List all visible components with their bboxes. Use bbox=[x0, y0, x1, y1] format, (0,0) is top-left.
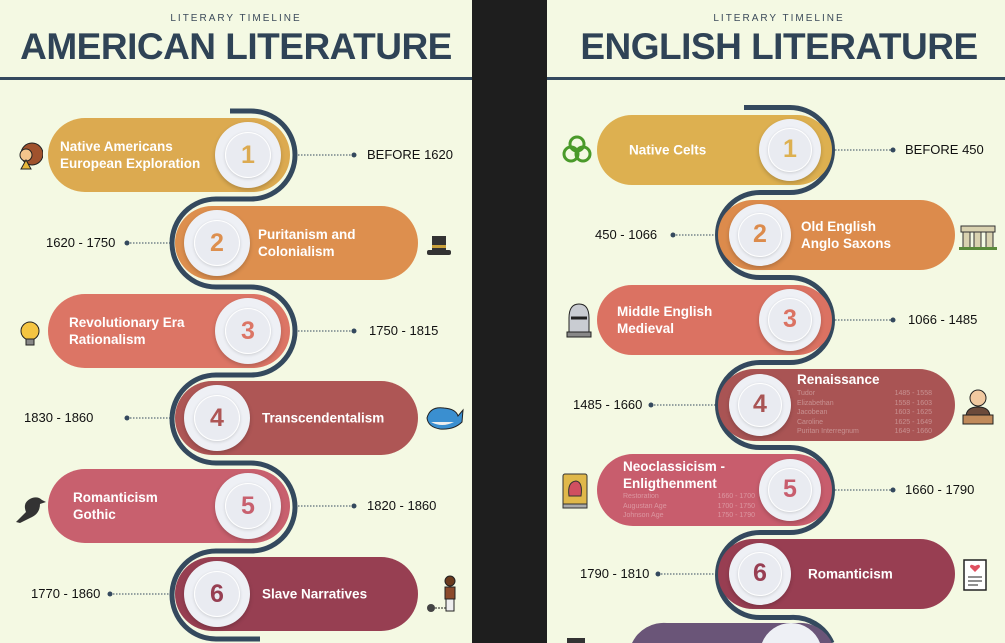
icon: slave figure bbox=[427, 576, 456, 612]
circle 2 bbox=[729, 204, 791, 266]
item 5: Romanticism bbox=[73, 490, 158, 505]
circle 6: 6 bbox=[753, 559, 767, 587]
date 6: 1790 - 1810 bbox=[580, 566, 649, 581]
icon: love letter scroll bbox=[963, 559, 987, 591]
item 4 bbox=[718, 369, 955, 441]
item 5: Neoclassicism - bbox=[623, 459, 725, 474]
item 4: Elizabethan bbox=[797, 400, 834, 406]
icon: raven bbox=[16, 497, 46, 523]
item 3 bbox=[597, 285, 832, 355]
date 4: 1830 - 1860 bbox=[24, 410, 93, 425]
item 2: Anglo Saxons bbox=[801, 236, 891, 251]
item 4 bbox=[175, 381, 418, 455]
item 2: Puritanism and bbox=[258, 227, 356, 242]
circle 3 bbox=[759, 289, 821, 351]
panel: english literature bbox=[547, 0, 1005, 643]
circle 4: 4 bbox=[210, 404, 224, 432]
item 1: Native Celts bbox=[629, 142, 706, 158]
item 5: 1660 - 1700 bbox=[718, 493, 755, 500]
circle 6: 6 bbox=[210, 580, 224, 608]
item 2 bbox=[718, 200, 955, 270]
item 6: Slave Narratives bbox=[262, 586, 367, 602]
title: AMERICAN LITERATURE bbox=[20, 26, 452, 67]
item 5 bbox=[48, 469, 290, 543]
item 5: 1750 - 1790 bbox=[718, 512, 755, 519]
circle 3 bbox=[215, 298, 281, 364]
item 3: Revolutionary Era bbox=[69, 315, 185, 330]
item 2 bbox=[175, 206, 418, 280]
circle 1 bbox=[759, 119, 821, 181]
icon: stonehenge bbox=[959, 226, 997, 250]
subtitle: LITERARY TIMELINE bbox=[170, 13, 302, 24]
item 4: 1603 - 1625 bbox=[895, 409, 932, 416]
circle 4 bbox=[184, 385, 250, 451]
item 5: 1700 - 1750 bbox=[718, 502, 755, 510]
icon: native headdress bbox=[20, 142, 43, 170]
item 6: Romanticism bbox=[808, 566, 893, 582]
icon: shakespeare bbox=[962, 390, 994, 424]
item 7 (partial) bbox=[632, 623, 832, 643]
icon: knight helmet bbox=[566, 304, 592, 338]
item 3: Middle English bbox=[617, 304, 712, 319]
item 1 bbox=[48, 118, 290, 192]
icon: celtic knot bbox=[562, 136, 592, 162]
item 6 bbox=[175, 557, 418, 631]
item 1 bbox=[597, 115, 832, 185]
date 3: 1066 - 1485 bbox=[908, 312, 977, 327]
item 4: Jacobean bbox=[797, 409, 827, 416]
circle 2: 2 bbox=[210, 228, 224, 256]
date 1: BEFORE 1620 bbox=[367, 147, 453, 162]
item 1: European Exploration bbox=[60, 156, 200, 171]
timeline path bbox=[632, 105, 896, 643]
item 4: 1625 - 1649 bbox=[895, 418, 932, 426]
item 4: Renaissance bbox=[797, 372, 880, 387]
circle 5: 5 bbox=[783, 475, 797, 503]
item 5: Enligthenment bbox=[623, 476, 717, 491]
circle 1 bbox=[215, 122, 281, 188]
circle 6 bbox=[729, 543, 791, 605]
timeline path bbox=[108, 108, 356, 642]
date 2: 450 - 1066 bbox=[595, 227, 657, 242]
circle 3: 3 bbox=[241, 316, 255, 344]
circle 1: 1 bbox=[241, 140, 255, 168]
circle 5: 5 bbox=[241, 492, 255, 520]
icon: whale bbox=[426, 407, 464, 430]
item 1: Native Americans bbox=[60, 139, 173, 154]
date 6: 1770 - 1860 bbox=[31, 586, 100, 601]
item 5: Johnson Age bbox=[623, 512, 663, 519]
circle 4 bbox=[729, 374, 791, 436]
date 5: 1820 - 1860 bbox=[367, 498, 436, 513]
item 4: Tudor bbox=[797, 390, 815, 397]
icon: partial bottom bbox=[567, 638, 585, 643]
item 5: Augustan Age bbox=[623, 502, 667, 510]
item 3: Rationalism bbox=[69, 332, 146, 347]
icon: lightbulb bbox=[20, 322, 40, 346]
circle 2 bbox=[184, 210, 250, 276]
circle 4: 4 bbox=[753, 390, 767, 418]
panel: american literature bbox=[0, 0, 472, 643]
item 2: Colonialism bbox=[258, 244, 335, 259]
circle 5 bbox=[759, 459, 821, 521]
circle 5 bbox=[215, 473, 281, 539]
item 5: Gothic bbox=[73, 507, 116, 522]
item 4: Transcendentalism bbox=[262, 410, 384, 426]
item 2: Old English bbox=[801, 219, 876, 234]
item 4: Caroline bbox=[797, 418, 823, 426]
subtitle: LITERARY TIMELINE bbox=[713, 13, 845, 24]
icon: book spartan bbox=[562, 474, 588, 508]
item 5 bbox=[597, 454, 832, 526]
item 4: 1558 - 1603 bbox=[895, 400, 932, 406]
date 2: 1620 - 1750 bbox=[46, 235, 115, 250]
date 4: 1485 - 1660 bbox=[573, 397, 642, 412]
item 6 bbox=[718, 539, 955, 609]
circle 6 bbox=[184, 561, 250, 627]
title: ENGLISH LITERATURE bbox=[580, 26, 978, 67]
circle 3: 3 bbox=[783, 305, 797, 333]
icon: pilgrim hat bbox=[427, 236, 451, 255]
date 5: 1660 - 1790 bbox=[905, 482, 974, 497]
circle 1: 1 bbox=[783, 135, 797, 163]
date 3: 1750 - 1815 bbox=[369, 323, 438, 338]
item 4: 1649 - 1660 bbox=[895, 428, 932, 435]
item 4: 1485 - 1558 bbox=[895, 390, 932, 397]
item 4: Puritan Interregnum bbox=[797, 428, 859, 435]
item 5: Restoration bbox=[623, 493, 659, 500]
date 1: BEFORE 450 bbox=[905, 142, 984, 157]
item 3: Medieval bbox=[617, 321, 674, 336]
circle 2: 2 bbox=[753, 220, 767, 248]
item 3 bbox=[48, 294, 290, 368]
